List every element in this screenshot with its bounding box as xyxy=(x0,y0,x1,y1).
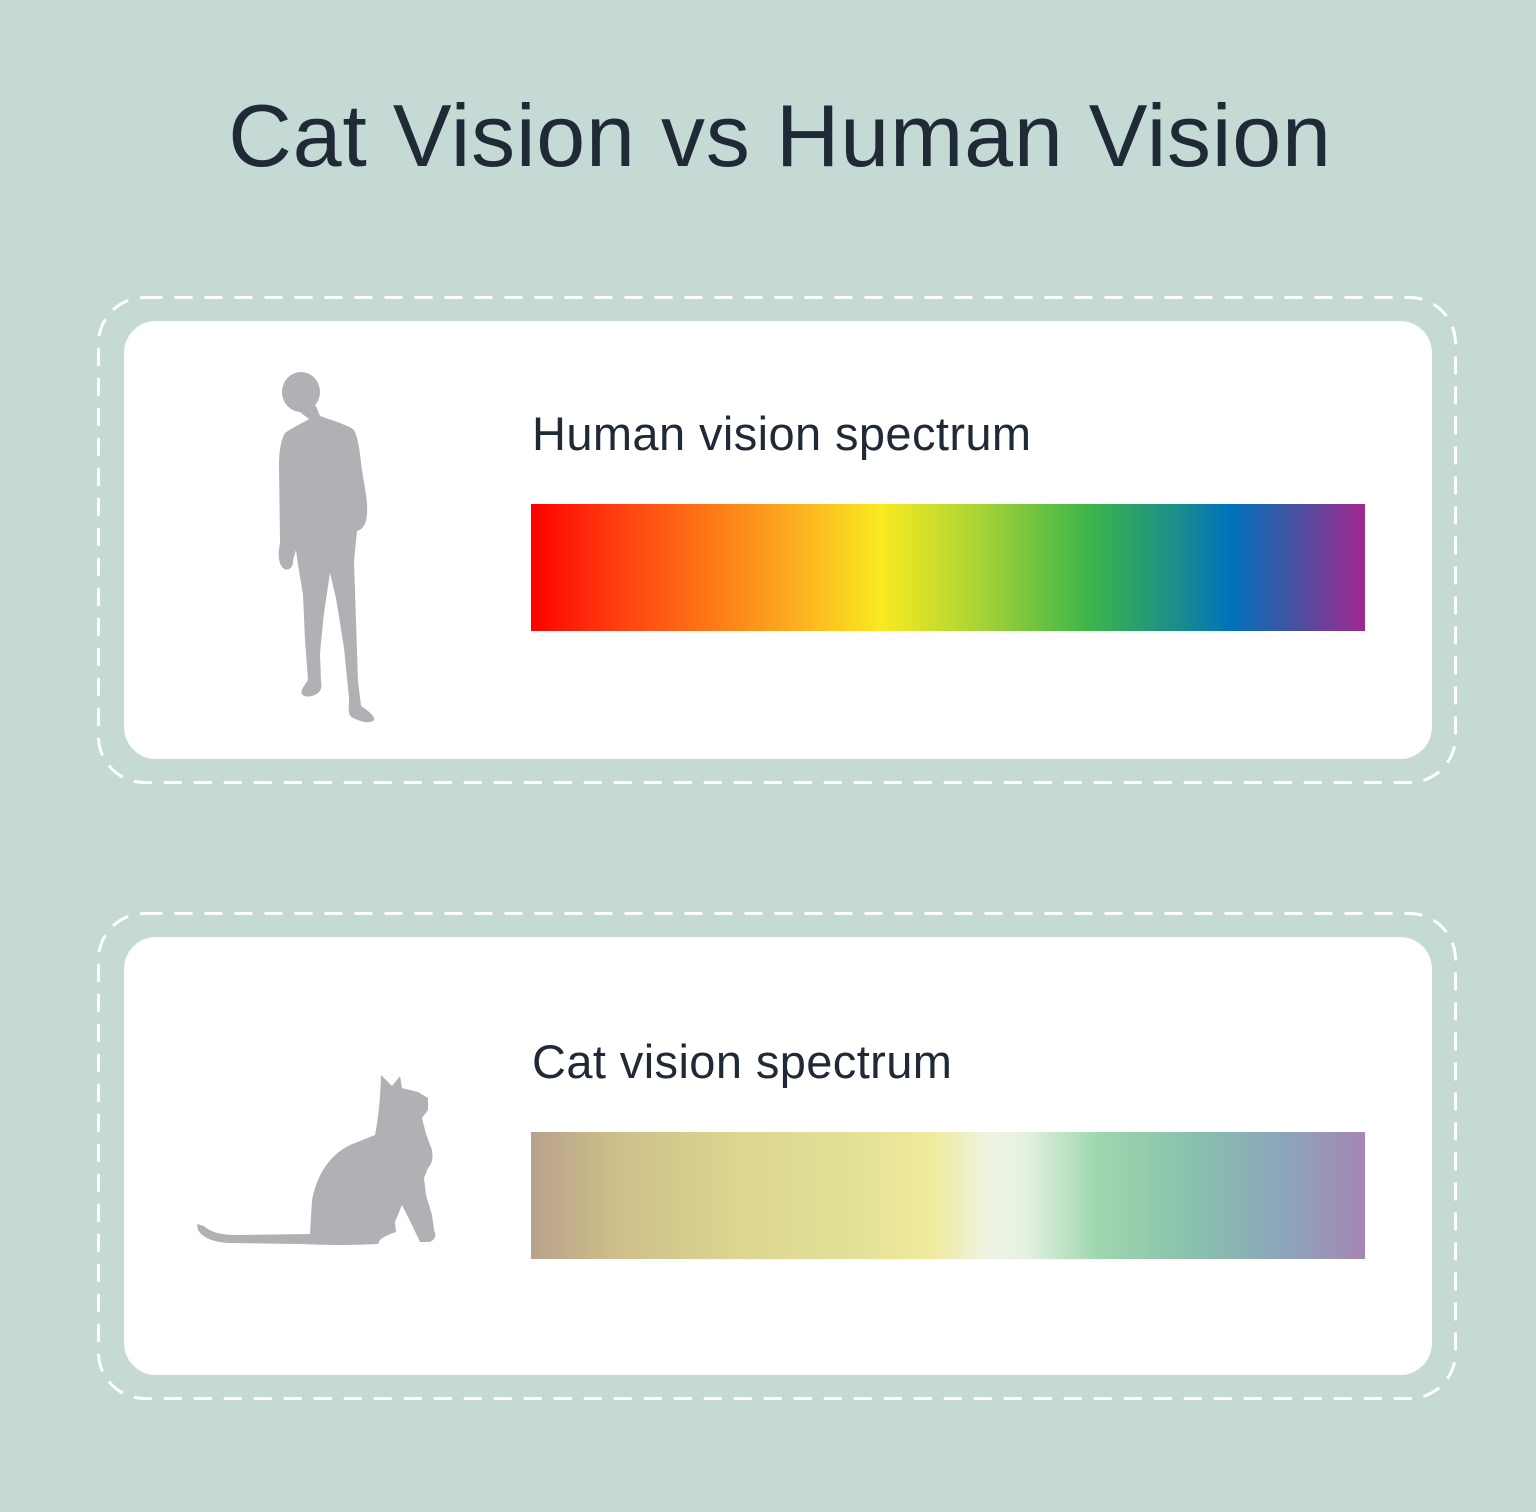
panel: human xyxy=(124,321,1432,759)
icon: cat silhouette xyxy=(197,1075,436,1245)
panel: cat dashed frame xyxy=(97,912,1457,1400)
heading: human spectrum: Human vision spectrum xyxy=(532,407,1031,460)
chart: human spectrum bar xyxy=(531,504,1365,631)
heading: cat spectrum: Cat vision spectrum xyxy=(532,1035,952,1088)
panel: cat xyxy=(124,937,1432,1375)
title: Cat Vision vs Human Vision xyxy=(228,86,1332,185)
chart: cat spectrum bar xyxy=(531,1132,1365,1259)
icon: human silhouette xyxy=(278,372,374,722)
panel: human dashed frame xyxy=(97,296,1457,784)
